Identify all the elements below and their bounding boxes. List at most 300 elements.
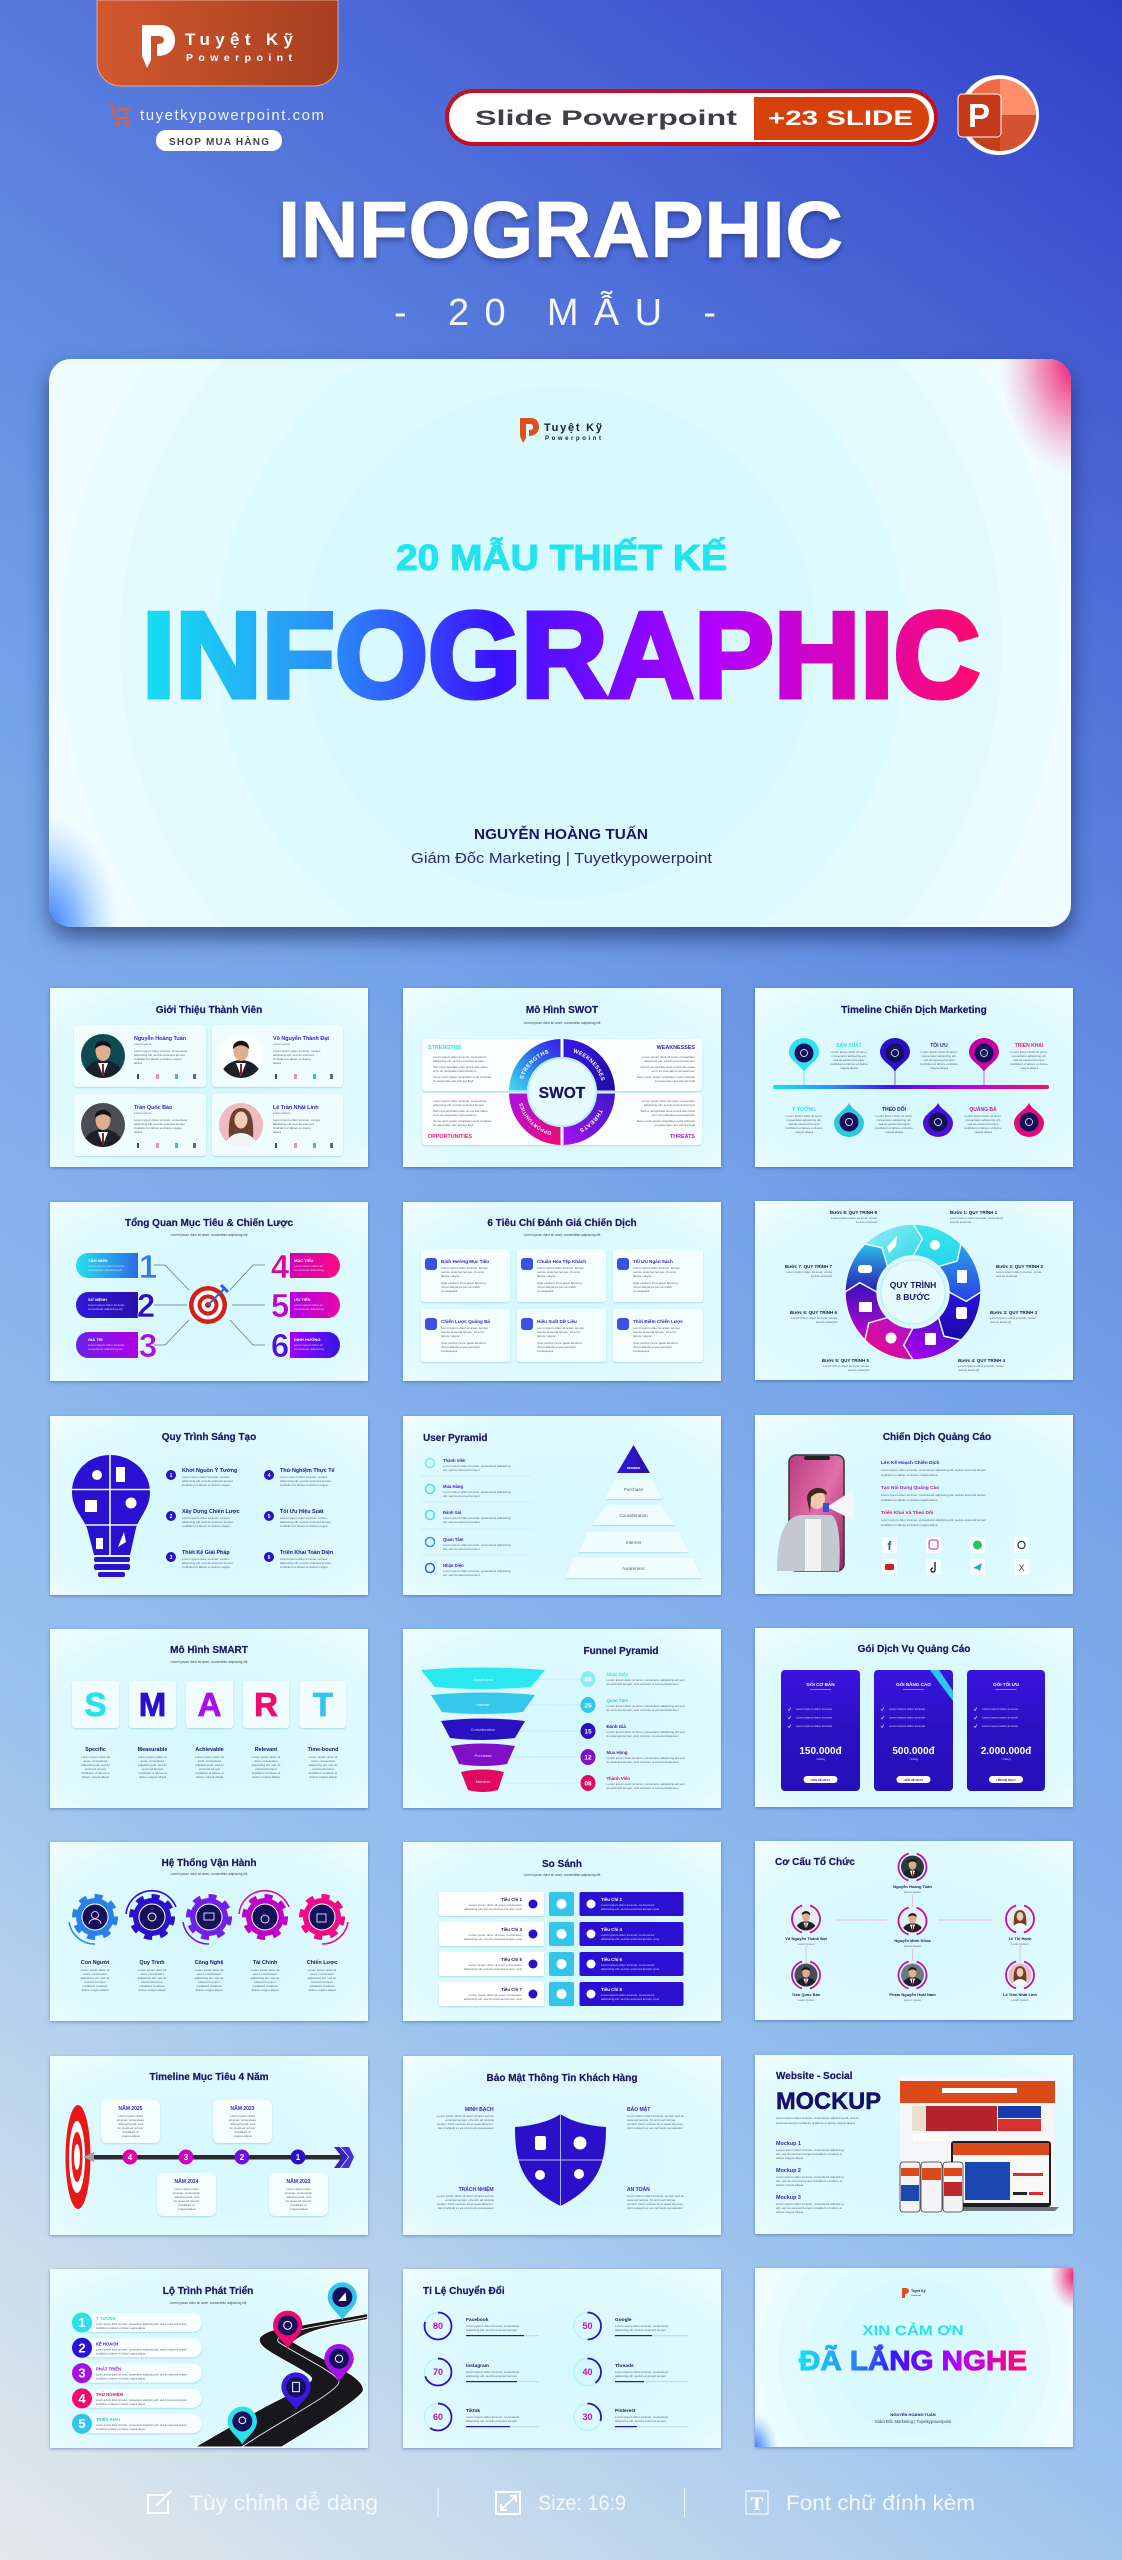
card Hiệu Suất Dữ Liệu: sed do eiusmod tempor. Ut enim [537,1330,581,1334]
mockup item 1: elit, sed do eiusmod tempor incididunt ut labore et [776,2152,842,2156]
list item Mua Hàng: elit, sed do eiusmod tempor [443,1494,480,1498]
pill 6 định hướng: ĐỊNH HƯỚNG [294,1337,321,1342]
compare row 4 [439,1982,684,2006]
plan basic: Lorem ipsum dolor sit amet [796,1707,832,1711]
pin: search [834,1103,864,1137]
label Measurable [138,1747,167,1779]
stat Google: adipiscing elit, sed do eiusmod tempor [615,2328,666,2332]
heading: Website - Social [776,2071,853,2082]
weaknesses text: error sit voluptatem accusantium [652,1069,695,1073]
stat Google: Lorem ipsum dolor sit amet, consectetur [615,2324,668,2328]
pin document [281,2372,311,2410]
icon: P logo [142,25,175,68]
campaign step 3: Triển Khai Và Theo Dõi [881,1509,933,1516]
icon: cart [111,103,130,125]
step: ý tưởng: incididunt ut labore et dolore [785,1126,823,1130]
rate 40: Nhận Diện [606,1672,629,1677]
step: quảng bá: incididunt ut labore et dolore [964,1126,1002,1130]
step 4 [72,2388,202,2408]
pill 1 tầm nhìn [76,1248,157,1285]
slide: Quy Trình Sáng Tạo [50,1416,368,1595]
slide: Timeline Chiến Dịch Marketing [755,988,1073,1167]
pill 6 định hướng: consectetur adipiscing [294,1347,324,1351]
stat Facebook: Facebook [466,2317,489,2323]
heading: Lộ Trình Phát Triển [163,2285,253,2297]
mockup item 2: dolore magna aliqua [776,2183,804,2187]
item 3: 3 [170,1555,173,1561]
step 5: Lorem ipsum dolor sit amet, consectetur adipiscing elit, sed do eiusmod tempor [96,2423,187,2427]
card NĂM 2023: NĂM 2023 [231,2105,255,2112]
letter card A [186,1681,233,1728]
card NĂM 2023: sit amet, consectetur [229,2118,256,2122]
text Quy Trình: Quy Trình [139,1960,165,1966]
icon: light bulb [70,1454,152,1577]
item 3 [166,1549,233,1569]
funnel [421,1668,545,1792]
step: sản xuất: incididunt ut labore et dolore [830,1062,868,1066]
pin: analysis [923,1103,953,1137]
member card 4: incididunt ut labore et dolore [273,1126,311,1130]
campaign step 2: Tạo Nội Dung Quảng Cáo [881,1485,939,1491]
text Quy Trình: dolore magna aliqua [138,1988,166,1992]
person Lê Thị Hạnh: Lê Thị Hạnh [1009,1936,1032,1941]
text Quy Trình: Lorem ipsum dolor sit [138,1968,166,1972]
pill orange part [754,97,929,140]
card Chuẩn Hóa Tệp Khách: Chuẩn Hóa Tệp Khách [537,1258,586,1264]
step: tối ưu: magna aliqua [930,1066,948,1070]
person Phạm Nguyễn Hoài Nam [889,1961,936,2002]
process wheel [845,1224,981,1360]
card NĂM 2024: incididunt ut [178,2203,195,2207]
step 5 label [822,1356,869,1372]
stat Google: 50 [582,2321,593,2331]
strengths text: sit aspernatur aut odit aut fugit [433,1079,474,1083]
funnel: Awareness [473,1677,493,1682]
letter card M: M [139,1686,166,1723]
plan advanced: GÓI NÂNG CAO [896,1680,931,1687]
step 1 label: sed do eiusmod [950,1220,972,1224]
card NĂM 2025 [101,2100,160,2143]
campaign step 2 [881,1485,986,1502]
slide: Cơ Cấu Tổ Chức [755,1841,1073,2020]
social icons [882,1537,1029,1575]
block An Toàn: nisi ut aliquid ex ea commodi consequatur [627,2206,683,2210]
step 2: Lorem ipsum dolor sit amet, consectetur adipiscing elit, sed do eiusmod tempor [96,2347,187,2351]
member card 2: incididunt ut labore et dolore [273,1057,311,1061]
label Relevant: amet, consectetur [254,1759,278,1763]
stat Pinterest [574,2404,688,2430]
marker 2 [234,2150,250,2164]
card Hiệu Suất Dữ Liệu: Lorem ipsum dolor sit amet, tempor [537,1326,584,1330]
step: theo dõi: magna aliqua [885,1130,903,1134]
text Công Nghệ: Lorem ipsum dolor sit [195,1968,224,1972]
swot top card [422,1039,702,1091]
stat Facebook: adipiscing elit, sed do eiusmod tempor [466,2328,517,2332]
item 5 [264,1508,331,1528]
strengths text: Sed ut perspiciatis unde omnis iste natus [433,1065,488,1069]
slide: Xin Cảm Ơn [753,2267,1075,2450]
phone with presenter [777,1455,853,1571]
card NĂM 2024: adipiscing elit, sed [174,2195,199,2199]
stat Facebook: 80 [433,2321,443,2331]
label Relevant: incididunt ut labore et [252,1771,280,1775]
mockup item 3: dolore magna aliqua [776,2210,804,2214]
label: Size: 16:9 [538,2492,626,2515]
text Công Nghệ: eiusmod tempor [198,1980,220,1984]
compare row 3: adipiscing elit, sed do eiusmod tempor, quis [601,1967,660,1971]
thanks headline: ĐÃ LẮNG NGHE [799,2345,1027,2376]
heading: User Pyramid [423,1433,487,1444]
stat Google: Google [615,2317,632,2323]
heading: Giới Thiệu Thành Viên [156,1005,262,1016]
gear Con Người [69,1896,116,1944]
swot ring: WEEKNESSES [574,1048,605,1080]
slide: Timeline Mục Tiêu 4 Năm [50,2056,368,2235]
card NĂM 2025: adipiscing elit, sed [118,2122,143,2126]
marker 4: 4 [128,2153,133,2162]
feature: size [496,2492,626,2515]
slide: Funnel Pyramid [403,1629,721,1808]
heading: Bảo Mật Thông Tin Khách Hàng [487,2073,637,2084]
card Thời Điểm Chiến Lược: labore magna [633,1334,652,1338]
stat Tiktok [424,2404,539,2430]
text Chiến Lược: eiusmod tempor [311,1980,333,1984]
step 1: incididunt ut labore et dolore magna aliqua [96,2326,145,2330]
step: triển khai: TRIỂN KHAI [1015,1042,1044,1049]
text Tài Chính: eiusmod tempor [254,1980,276,1984]
gear Công Nghệ [183,1896,230,1944]
intro text [776,2116,859,2125]
label Relevant: eiusmod tempor [255,1767,277,1771]
pill 1 tầm nhìn: TẦM NHÌN [88,1258,108,1263]
step 5: incididunt ut labore et dolore magna aliqua [96,2427,145,2431]
step 3: 3 [78,2366,86,2381]
opportunities text [428,1099,492,1140]
member card 3: incididunt ut labore et dolore magna [134,1126,182,1130]
pyramid: Awareness [622,1566,646,1571]
weaknesses text: Nemo enim ipsam voluptatem quia voluptas [637,1075,695,1079]
card NĂM 2022: sit amet, consectetur [285,2191,312,2195]
rate 15: do eiusmod tempor, quis nostrum ut ad exercitationem [606,1734,679,1738]
card NĂM 2023 [213,2100,272,2143]
card Định Hướng Mục Tiêu [421,1249,510,1302]
opportunities text: Lorem ipsum dolor sit amet, consectetur [433,1099,486,1103]
list item Nhận Diện: Nhận Diện [443,1563,464,1568]
member card 2: adipiscing elit, sed do eiusmod [273,1053,314,1057]
card Chiến Lược Quảng Bá: sed do eiusmod tempor. Ut enim [441,1330,485,1334]
mockup item 3: elit, sed do eiusmod tempor incididunt ut labore et [776,2206,842,2210]
step 3 [72,2363,202,2383]
member card 4: Lorem ipsum [273,1111,291,1115]
person Nguyễn Minh Khoa: Lorem ipsum [904,1944,922,1948]
subtitle: - 20 MẪU - [394,290,716,334]
text Con Người: adipiscing elit, sed do [81,1976,110,1980]
pill 3 giá trị: 3 [139,1327,157,1364]
compare row 4: Lorem ipsum dolor sit amet, consectetur [469,1993,522,1997]
item 4: 4 [268,1473,271,1479]
step: ý tưởng [785,1106,823,1134]
step: theo dõi: sed do eiusmod tempor [878,1122,910,1126]
slide: Tỉ Lệ Chuyển Đổi [403,2269,721,2448]
text Tài Chính: adipiscing elit, sed do [251,1976,280,1980]
step: sản xuất: consectetur adipiscing elit, [831,1054,867,1058]
step 3 label: Bước 3: QUY TRÌNH 3 [990,1308,1038,1315]
item 6: adipiscing elit, sed do eiusmod tempor [280,1561,331,1565]
icon: powerpoint: P [968,97,990,134]
item 1: Khơi Nguồn Ý Tưởng [182,1467,237,1474]
mockup item 1: Mockup 1 [776,2141,801,2147]
card NĂM 2023: adipiscing elit, sed [230,2122,255,2126]
opportunities text: sit aspernatur aut odit aut fugit [433,1123,474,1127]
card Chuẩn Hóa Tệp Khách: labore magna [537,1274,556,1278]
rate 25 [580,1697,685,1713]
card NĂM 2025: incididunt ut [122,2130,139,2134]
person Nguyễn Minh Khoa [894,1907,931,1948]
item 2: Lorem ipsum dolor sit amet, consec [182,1516,230,1520]
step: theo dõi: Lorem ipsum dolor sit amet, [875,1114,913,1118]
item 6: Lorem ipsum dolor sit amet, consec [280,1557,328,1561]
stat Threads: 40 [582,2367,593,2377]
mockup item 3 [776,2195,844,2214]
plan premium: Lorem ipsum dolor sit amet [982,1724,1018,1728]
heading: Tổng Quan Mục Tiêu & Chiến Lược [125,1217,293,1229]
pyramid: Purchase [624,1487,644,1492]
text Công Nghệ: dolore magna aliqua [195,1988,223,1992]
step: quảng bá: sed do eiusmod tempor [967,1122,999,1126]
compare row 1: Tiêu Chí 1 [501,1897,523,1902]
label Achievable: incididunt ut labore et [195,1771,224,1775]
person Lê Trần Nhật Linh [1003,1961,1037,2002]
stat Instagram: 70 [433,2367,443,2377]
label Time-bound: adipiscing elit, sed do [309,1763,338,1767]
person Trần Quốc Bảo [792,1961,821,2002]
rate 25: Quan Tâm [606,1698,628,1703]
card NĂM 2022 [269,2173,328,2216]
member card 3 [74,1094,206,1158]
plan basic: GÓI CƠ BẢN [806,1680,835,1687]
compare row 3: Lorem ipsum dolor sit amet, consectetur [601,1963,654,1967]
marker 4 [122,2150,138,2164]
list item Mua Hàng: Lorem ipsum dolor sit amet, consectetur adipiscing [443,1490,511,1494]
slide: So Sánh [403,1842,721,2021]
stat Instagram: Instagram [466,2363,489,2369]
text Tài Chính: Tài Chính [253,1960,277,1966]
hero kicker: 20 MẪU THIẾT KẾ [396,536,727,578]
letter card M [129,1681,176,1728]
step: theo dõi: consectetur adipiscing elit, [876,1118,912,1122]
mockup item 1: Lorem ipsum dolor sit amet, consectetur adipiscing [776,2148,844,2152]
swot bottom card [422,1093,702,1145]
step: sản xuất [830,1042,868,1070]
plan basic: 150.000đ [799,1746,843,1757]
letter card S: S [84,1686,107,1723]
card Chiến Lược Quảng Bá: Quis nostrum sit et quasi laborum, [441,1341,487,1345]
label Relevant [252,1747,281,1779]
label Specific [81,1747,110,1779]
pyramid: Interest [626,1540,642,1545]
campaign step 1: Lên Kế Hoạch Chiến Dịch [881,1459,939,1466]
step 6 label: sed do eiusmod [816,1320,837,1324]
weaknesses text: Lorem ipsum dolor sit amet, consectetur [642,1055,695,1059]
step: quảng bá: magna aliqua [974,1130,992,1134]
heading: Quy Trình Sáng Tạo [162,1432,256,1443]
text Quy Trình: eiusmod tempor [141,1980,163,1984]
card Tối Ưu Ngân Sách: nisi ut aliquid ex ea commodi [633,1285,672,1289]
sub text: Lorem ipsum dolor sit amet, consectetur adipiscing elit [171,1233,247,1237]
rate 40: do eiusmod tempor, quis nostrum ut ad exercitationem [606,1682,679,1686]
rate 08: 08 [584,1780,592,1788]
marker 3: 3 [184,2153,189,2162]
item 4: adipiscing elit, sed do eiusmod tempor [280,1479,331,1483]
card Định Hướng Mục Tiêu: Lorem ipsum dolor sit amet, tempor [441,1266,488,1270]
rate 12: Mua Hàng [606,1750,628,1755]
stat Tiktok: Tiktok [466,2408,480,2414]
list item Đánh Giá [426,1510,511,1524]
heading: Timeline Mục Tiêu 4 Năm [149,2072,269,2083]
campaign step 2: incididunt ut labore et dolore magna aliqua [881,1498,938,1502]
step: ý tưởng: magna aliqua [795,1130,813,1134]
heading: Chiến Dịch Quảng Cáo [883,1431,991,1443]
rate 08: do eiusmod tempor, quis nostrum ut ad exercitationem [606,1786,679,1790]
step: tối ưu [920,1042,958,1070]
text Quy Trình [138,1960,167,1992]
card NĂM 2022: magna aliqua [289,2207,308,2211]
plan advanced: Lorem ipsum dolor sit amet [889,1716,925,1720]
label Relevant: Relevant [255,1747,277,1753]
stat Facebook [424,2312,539,2340]
person Nguyễn Hoàng Tuấn: Lorem ipsum [904,1890,922,1894]
step: ý tưởng: Ý TƯỞNG [792,1106,816,1113]
step 7 label: sed do eiusmod [811,1274,832,1278]
card Định Hướng Mục Tiêu: Định Hướng Mục Tiêu [441,1259,489,1264]
person Võ Nguyễn Thành Đạt: Võ Nguyễn Thành Đạt [785,1936,827,1941]
pin idea [228,2407,257,2445]
heading: So Sánh [542,1859,582,1870]
pin: rocket [1014,1103,1044,1137]
card Chuẩn Hóa Tệp Khách [517,1249,606,1302]
hero logo: Powerpoint [545,436,601,442]
block Bảo Mật: nisi ut aliquid ex ea commodi consequatur [627,2126,683,2130]
campaign step 3: incididunt ut labore et dolore magna aliqua [881,1523,938,1527]
pill 2 sứ mệnh: SỨ MỆNH [88,1297,107,1302]
block An Toàn: eiusmod tempor. Ut enim ad minima [627,2198,675,2202]
sub text: Lorem ipsum dolor sit amet, consectetur adipiscing elit [524,1873,600,1877]
item 2: adipiscing elit, sed do eiusmod tempor [182,1520,233,1524]
block Bảo Mật: BẢO MẬT [627,2106,650,2113]
text Con Người: amet, consectetur [83,1972,107,1976]
text Công Nghệ: adipiscing elit, sed do [195,1976,224,1980]
opportunities text: OPPORTUNITIES [428,1134,472,1140]
heading: Hệ Thống Vận Hành [162,1857,256,1869]
member card 4: aliqua [273,1130,281,1134]
step 1 label: Bước 1: QUY TRÌNH 1 [950,1208,998,1215]
block Bảo Mật: veniam. Duis nostrum sit et quasi laborum, [627,2122,684,2126]
pill 4 mục tiêu: MỤC TIÊU [294,1258,313,1263]
marker 1 [290,2150,306,2164]
member card 3: Lorem ipsum [134,1111,152,1115]
card NĂM 2024: NĂM 2024 [175,2178,199,2185]
pill 4 mục tiêu: 4 [271,1248,290,1285]
plan premium: 2.000.000đ [981,1746,1032,1757]
card NĂM 2022: do eiusmod tempor [286,2199,311,2203]
plan premium: GÓI TỐI ƯU [993,1680,1020,1687]
pin gear [324,2344,354,2382]
card Chiến Lược Quảng Bá: nisi ut aliquid ex ea commodi [441,1345,480,1349]
plan premium [967,1670,1045,1791]
rate 15: Lorem ipsum dolor sit amet, consectetur adipiscing elit sed [606,1730,685,1734]
item 6: 6 [268,1555,271,1561]
person Trần Quốc Bảo: Trần Quốc Bảo [792,1992,821,1997]
rate 12: 12 [584,1754,592,1762]
connectors [806,1895,1020,1963]
list item Thành Viên: Thành Viên [443,1458,466,1463]
gear Quy Trình [126,1891,176,1938]
label: Font chữ đính kèm [786,2492,975,2515]
mockup item 2 [776,2168,844,2187]
step: triển khai: sed do eiusmod tempor [1013,1058,1045,1062]
slide: Giới Thiệu Thành Viên [50,988,368,1167]
member card 1: aliqua [134,1061,142,1065]
logo subname: Powerpoint [186,52,292,64]
item 5: Lorem ipsum dolor sit amet, consec [280,1516,328,1520]
label Achievable: Lorem ipsum dolor sit [195,1755,224,1759]
step: tối ưu: sed do eiusmod tempor [923,1058,955,1062]
member card 1: Nguyễn Hoàng Tuấn [134,1035,186,1042]
step 3 label [990,1308,1038,1324]
person Phạm Nguyễn Hoài Nam: Phạm Nguyễn Hoài Nam [889,1992,936,1997]
small logo: Tuyệt Kỹ [911,2289,926,2293]
card Định Hướng Mục Tiêu: nisi ut aliquid ex ea commodi [441,1285,480,1289]
pill 4 mục tiêu: Lorem ipsum dolor sit [294,1264,323,1268]
pill 1 tầm nhìn: consectetur adipiscing elit [88,1268,123,1272]
card Chiến Lược Quảng Bá [421,1309,510,1362]
card Tối Ưu Ngân Sách [613,1249,703,1302]
heading: Cơ Cấu Tổ Chức [775,1856,855,1868]
card Chiến Lược Quảng Bá: Lorem ipsum dolor sit amet, tempor [441,1326,488,1330]
step: tối ưu: TỐI ƯU [930,1042,948,1049]
step 5 label: Lorem ipsum dolor sit amet, conse [823,1364,869,1368]
pill 3 giá trị: GIÁ TRỊ [88,1337,103,1342]
slide: Hệ Thống Vận Hành [50,1842,368,2021]
block Minh Bạch: MINH BẠCH [465,2107,494,2113]
label Specific: adipiscing elit, sed do [81,1763,110,1767]
block Trách Nhiệm: nisi ut aliquid ex ea commodi consequatur [438,2206,494,2210]
hero logo: Tuyệt Kỹ [544,422,603,434]
text Công Nghệ: amet, consectetur [197,1972,221,1976]
step 7 label [785,1262,832,1278]
campaign step 1: incididunt ut labore et dolore magna aliqua [881,1473,938,1477]
slide: Gói Dịch Vụ Quảng Cáo [755,1628,1073,1807]
label Achievable: dolore magna aliqua [196,1775,223,1779]
plan basic: Lorem ipsum dolor sit amet [796,1724,832,1728]
label Specific: Specific [85,1747,106,1753]
step 6 label [790,1308,837,1324]
step 1: Lorem ipsum dolor sit amet, consectetur adipiscing elit, sed do eiusmod tempor [96,2322,187,2326]
list item Thành Viên [426,1458,511,1472]
text Tài Chính [251,1960,280,1992]
presenter role: Giám Đốc Marketing | Tuyetkypowerpoint [411,850,713,867]
funnel: Member [476,1779,491,1784]
member card 4 [212,1094,344,1158]
stat Google [574,2312,688,2340]
pill count: +23 SLIDE [768,107,913,130]
step 5: TRIỂN KHAI [96,2417,120,2422]
card NĂM 2024: sit amet, consectetur [173,2191,200,2195]
step 6 label: Bước 6: QUY TRÌNH 6 [790,1308,837,1315]
item 6 [264,1549,333,1569]
pill 5 ưu tiên: Lorem ipsum dolor sit [294,1303,323,1307]
step: triển khai [1010,1042,1048,1070]
